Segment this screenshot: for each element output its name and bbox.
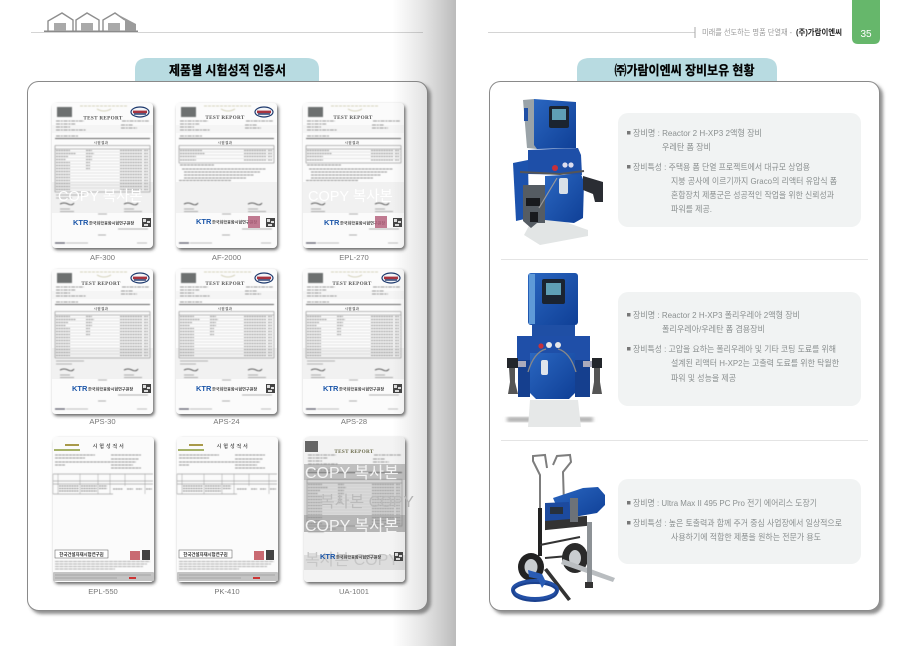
certificate: UA-1001: 한국화학융합시험연구원장	[336, 554, 381, 560]
divider	[501, 440, 868, 442]
certificate: APS-28	[303, 269, 404, 414]
page number tab: 35	[860, 29, 872, 40]
certificate: EPL-270	[303, 103, 404, 248]
certificate: AF-300: KTR	[73, 218, 89, 227]
running header text: 미래를 선도하는 명품 단열재 -	[702, 27, 792, 37]
header icon: three houses	[44, 13, 138, 32]
certificate: EPL-270: 시험결과	[345, 140, 360, 145]
left page background	[0, 0, 456, 646]
certificate: APS-24	[176, 269, 277, 414]
panel: equipment	[490, 82, 880, 610]
label: UA-1001: UA-1001	[339, 587, 369, 596]
certificate: AF-300: 한국화학융합시험연구원장	[89, 220, 134, 226]
certificate: UA-1001	[304, 437, 414, 582]
certificate: PK-410: 시험성적서	[216, 442, 250, 450]
certificate: APS-28: 시험결과	[345, 306, 360, 311]
certificate: UA-1001: 복사본 COPY	[320, 493, 414, 511]
certificate: APS-30	[52, 269, 153, 414]
certificate: UA-1001: COPY 복사본	[305, 464, 399, 482]
label: EPL-270: EPL-270	[339, 253, 369, 262]
right header rule	[488, 32, 695, 34]
spec box: Reactor polyurethane-foam unit: 지붕 공사에 이르기까지 Graco의 리액터 유압식 폼	[671, 175, 837, 186]
spec box: polyurea unit: 폴리우레아/우레탄 폼 겸용장비	[662, 323, 765, 334]
spec box: polyurea unit: 설계된 리액터 H-XP2는 고출력 도료를 위한 탁월한	[671, 357, 839, 368]
right page background	[456, 0, 913, 646]
spec box: polyurea unit: 장비명 : Reactor 2 H-XP3 폴리우레아 2액형 장비	[633, 309, 800, 320]
spec box: airless sprayer	[618, 479, 861, 564]
certificate: EPL-270: KTR	[324, 218, 340, 227]
page number tab	[852, 0, 880, 44]
certificate: EPL-270: COPY 복사본	[308, 188, 393, 205]
spec box: airless sprayer: 장비특성 : 높은 토출력과 함께 주거 중심 사업장에서 일상적으로	[633, 517, 842, 528]
certificate: AF-300: 시험결과	[94, 140, 109, 145]
certificate: APS-30: 한국화학융합시험연구원장	[88, 386, 133, 392]
running header text: (주)가람이엔씨	[796, 27, 842, 37]
certificate: EPL-550: 한국건설자재시험연구원	[59, 551, 104, 558]
label: APS-24: APS-24	[213, 417, 240, 426]
spec box: Reactor polyurethane-foam unit: 장비특성 : 주택용 폼 단열 프로젝트에서 대규모 상업용	[633, 162, 810, 172]
divider	[501, 258, 868, 260]
certificate: APS-30: 시험결과	[94, 306, 109, 311]
spec box: Reactor polyurethane-foam unit: 혼합장치 제품군은 성공적인 작업을 위한 신뢰성과	[671, 189, 834, 200]
label: PK-410: PK-410	[214, 587, 240, 596]
certificate: EPL-550	[53, 437, 154, 582]
left tab heading: 제품별 시험성적 인증서	[169, 63, 286, 78]
certificate: UA-1001: TEST REPORT	[334, 449, 374, 455]
panel: certificates	[28, 82, 428, 610]
certificate: AF-2000: TEST REPORT	[205, 115, 245, 121]
right tab heading	[577, 58, 777, 81]
certificate: AF-300: TEST REPORT	[83, 116, 123, 122]
certificate: AF-300: COPY 복사본	[58, 188, 143, 205]
certificate: AF-2000: KTR	[196, 217, 212, 226]
spec box: polyurea unit	[618, 292, 861, 406]
certificate: APS-24: KTR	[196, 384, 212, 393]
page fold shading	[392, 0, 456, 646]
certificate: APS-28: TEST REPORT	[332, 281, 372, 287]
certificate: EPL-550: 시험성적서	[92, 442, 126, 450]
certificate: APS-24: 시험결과	[218, 306, 233, 311]
certificate: PK-410: 한국건설자재시험연구원	[183, 551, 228, 558]
certificate: APS-24: 한국화학융합시험연구원장	[212, 386, 257, 392]
spec box: airless sprayer: 사용하기에 적합한 제품을 원하는 전문가 용도	[671, 531, 821, 542]
certificate: UA-1001: 복사본 COPY	[305, 551, 399, 569]
certificate: AF-300	[52, 103, 153, 248]
running header text	[695, 27, 842, 38]
label: EPL-550: EPL-550	[88, 587, 118, 596]
label: AF-300: AF-300	[90, 253, 115, 262]
label: APS-28: APS-28	[341, 417, 367, 426]
image: Reactor 2 H-XP3 polyurea unit	[507, 273, 602, 427]
spec box: Reactor polyurethane-foam unit	[618, 113, 861, 227]
spec box: polyurea unit: 파워 및 성능을 제공	[671, 372, 736, 383]
left header rule	[31, 32, 423, 34]
spec box: airless sprayer: 장비명 : Ultra Max II 495 PC Pro 전기 에어리스 도장기	[633, 498, 817, 508]
spec box: Reactor polyurethane-foam unit: 파워를 제공.	[671, 204, 712, 214]
certificate: EPL-270: 한국화학융합시험연구원장	[340, 220, 385, 226]
right tab heading: ㈜가람이엔씨 장비보유 현황	[614, 63, 755, 78]
certificate: UA-1001: KTR	[320, 552, 336, 561]
left tab heading	[135, 58, 319, 81]
spec box: polyurea unit: 장비특성 : 고압을 요하는 폴리우레아 및 기타 코팅 도료를 위해	[633, 343, 836, 354]
certificate: AF-2000: 한국화학융합시험연구원장	[212, 218, 257, 224]
certificate: AF-2000: 시험결과	[218, 140, 233, 145]
certificate: APS-28: KTR	[323, 384, 339, 393]
certificate: UA-1001: COPY 복사본	[305, 517, 399, 535]
image: Ultra Max II 495 PC Pro sprayer	[513, 455, 615, 601]
certificate: APS-30: KTR	[72, 384, 88, 393]
certificate: EPL-270: TEST REPORT	[333, 115, 373, 121]
certificate: APS-24: TEST REPORT	[205, 281, 245, 287]
label: AF-2000: AF-2000	[212, 253, 241, 262]
certificate: AF-2000	[176, 103, 277, 248]
image: Reactor 2 H-XP3 two-component unit	[513, 99, 603, 245]
spec box: Reactor polyurethane-foam unit: 장비명 : Reactor 2 H-XP3 2액형 장비	[633, 127, 762, 138]
spec box: Reactor polyurethane-foam unit: 우레탄 폼 장비	[662, 142, 711, 152]
label: APS-30: APS-30	[89, 417, 116, 426]
certificate: PK-410	[177, 437, 278, 582]
certificate: APS-28: 한국화학융합시험연구원장	[339, 386, 384, 392]
certificate: APS-30: TEST REPORT	[81, 281, 121, 287]
